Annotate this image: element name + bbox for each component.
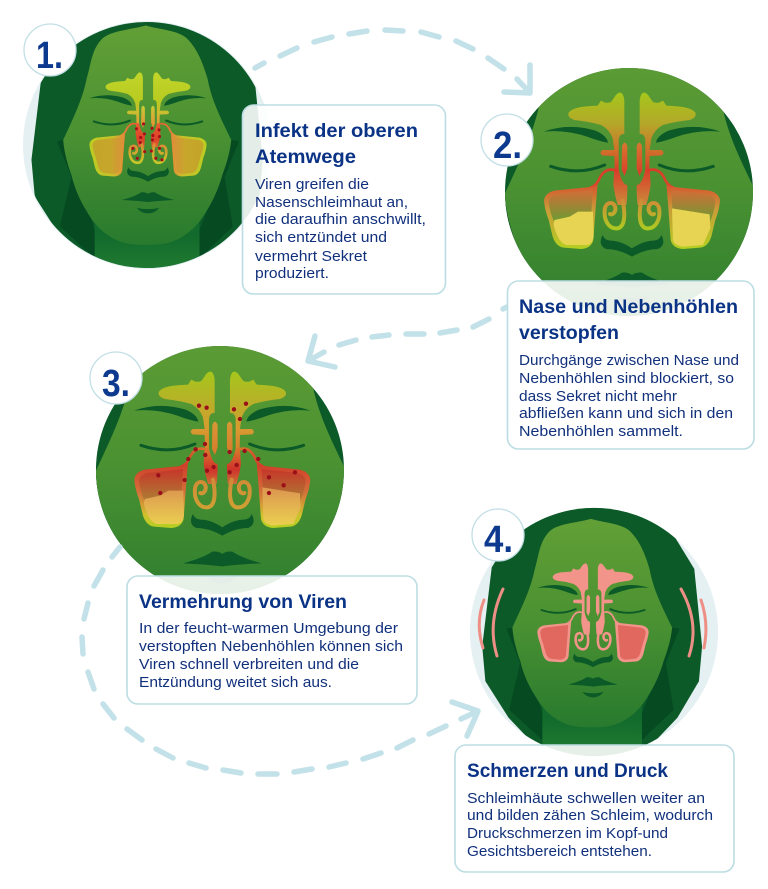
heading: step 2 — [519, 297, 738, 344]
arrow: step 2 to step 3 — [308, 307, 507, 367]
badge: number 4: 4. — [484, 519, 513, 561]
badge: number 1: 1. — [36, 35, 63, 77]
body text: step 2: Nebenhöhlen sind blockiert, so — [519, 371, 734, 387]
body text: step 1: vermehrt Sekret — [255, 249, 367, 265]
panel: step 1 infection — [23, 21, 264, 269]
body text: step 3: verstopften Nebenhöhlen können sich — [139, 639, 403, 655]
badge: number 3: 3. — [102, 363, 130, 405]
badge: number 2 — [481, 114, 533, 167]
body text: step 1: produziert. — [255, 266, 329, 282]
body text: step 4: Schleimhäute schwellen weiter an — [467, 791, 705, 807]
body text: step 3 — [139, 621, 403, 691]
body text: step 2: Nebenhöhlen sammelt. — [519, 424, 683, 440]
panel: step 3 virus multiplication — [89, 346, 344, 594]
body text: step 2 — [519, 353, 739, 440]
heading: step 1: Atemwege — [255, 147, 356, 168]
callout: step 1 text — [242, 105, 446, 294]
body text: step 2: abfließen kann und sich in den — [519, 406, 733, 422]
body text: step 4: Gesichtsbereich entstehen. — [467, 844, 652, 860]
panel: step 2 blocked — [480, 68, 753, 316]
heading: step 4: Schmerzen und Druck — [467, 761, 668, 782]
heading: step 2: Nase und Nebenhöhlen — [519, 297, 738, 318]
callout: step 4 text — [455, 745, 734, 872]
arrow: step 1 to step 2 — [255, 30, 530, 93]
body text: step 2: Durchgänge zwischen Nase und — [519, 353, 739, 369]
body text: step 3: In der feucht-warmen Umgebung der — [139, 621, 398, 637]
badge: number 3 — [90, 352, 142, 405]
icon: pain arcs — [479, 589, 706, 656]
callout: step 2 text — [508, 281, 754, 449]
heading: step 1: Infekt der oberen — [255, 121, 418, 142]
badge: number 4 — [472, 509, 524, 561]
callout: step 3 text — [127, 576, 417, 704]
panel: step 4 pain — [470, 507, 718, 762]
badge: number 1 — [24, 24, 76, 77]
body text: step 1: die daraufhin anschwillt, — [255, 212, 426, 228]
head illustration 4 — [482, 507, 702, 762]
body text: step 1: Viren greifen die — [255, 177, 369, 193]
body text: step 4: und bilden zähen Schleim, wodurch — [467, 808, 713, 824]
heading: step 2: verstopfen — [519, 323, 619, 344]
head illustration 2 — [505, 68, 753, 316]
pale circle behind head 1 — [23, 21, 271, 269]
heading: step 3: Vermehrung von Viren — [139, 592, 347, 613]
arrow: step 3 to step 4 — [82, 547, 478, 774]
body text: step 3: Viren schnell verbreiten und die — [139, 657, 359, 673]
body text: step 1: sich entzündet und — [255, 230, 387, 246]
badge: number 2: 2. — [493, 125, 522, 167]
body text: step 1: Nasenschleimhaut an, — [255, 195, 408, 211]
head illustration 1 — [31, 13, 263, 282]
body text: step 2: dass Sekret nicht mehr — [519, 389, 677, 405]
heading: step 1 — [255, 121, 418, 168]
body text: step 1 — [255, 177, 426, 282]
head illustration 3 — [96, 346, 344, 594]
pale circle behind head 4 — [470, 508, 718, 756]
body text: step 3: Entzündung weitet sich aus. — [139, 675, 332, 691]
body text: step 4: Druckschmerzen im Kopf-und — [467, 826, 668, 842]
body text: step 4 — [467, 791, 713, 860]
